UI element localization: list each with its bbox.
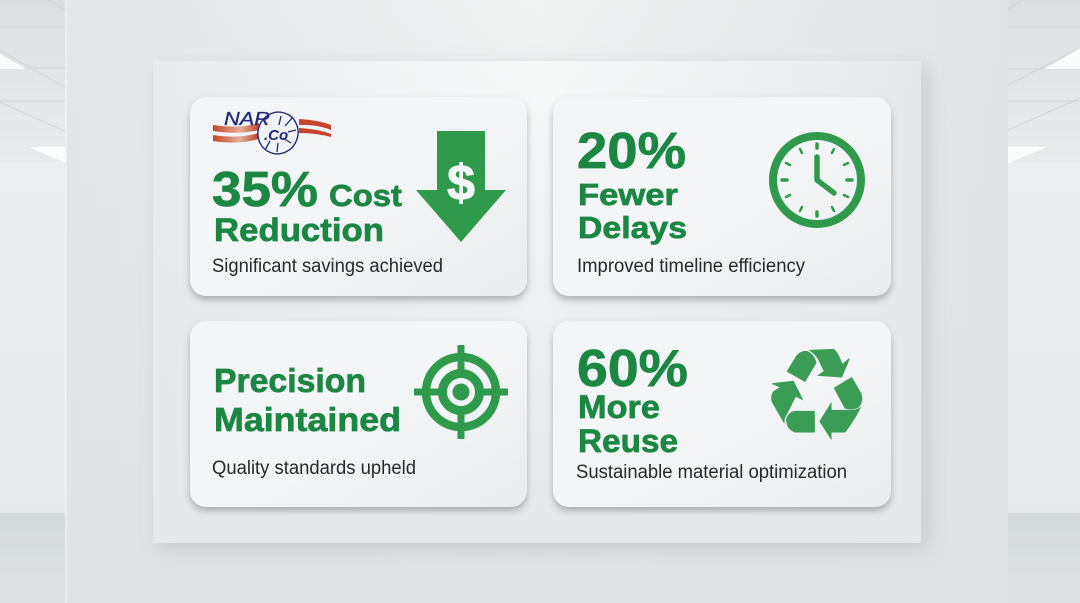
display panel: [153, 61, 921, 543]
heading: Fewer Delays: Delays: [578, 210, 687, 245]
heading: Precision Maintained: [214, 362, 401, 438]
icon: down arrow with dollar: $: [447, 155, 475, 211]
caption: Improved timeline efficiency: [577, 256, 805, 277]
heading: More Reuse: More: [578, 389, 660, 425]
icon: target: [414, 345, 508, 439]
heading: 20%: 20%: [577, 122, 686, 179]
caption: Quality standards upheld: [212, 458, 416, 479]
caption: Sustainable material optimization: [576, 462, 847, 483]
card: fewer delays: [553, 97, 891, 296]
heading: More Reuse: Reuse: [578, 423, 678, 459]
logo: NARCo: NAR: [224, 109, 270, 129]
heading: 35% Cost: 35%: [212, 163, 318, 217]
caption: Significant savings achieved: [212, 256, 443, 277]
heading: Precision Maintained: Maintained: [214, 401, 401, 438]
logo: NARCo: .Co: [264, 127, 288, 144]
icon: recycle: [772, 349, 862, 439]
heading: 35% Cost: [212, 163, 402, 217]
card: more reuse: [553, 321, 891, 507]
logo: NARCo: [213, 106, 331, 160]
card: precision maintained: [190, 321, 527, 507]
card: cost reduction: [190, 97, 527, 296]
heading: Fewer Delays: Fewer: [578, 177, 678, 212]
icon: clock: [773, 136, 861, 224]
icon: down arrow with dollar: [416, 131, 506, 242]
heading: 60%: 60%: [577, 340, 688, 398]
heading: Reduction: Reduction: [214, 212, 384, 248]
heading: 35% Cost: Cost: [329, 178, 402, 213]
heading: Fewer Delays: [578, 177, 687, 245]
heading: Precision Maintained: Precision: [214, 362, 366, 399]
heading: More Reuse: [578, 389, 678, 459]
